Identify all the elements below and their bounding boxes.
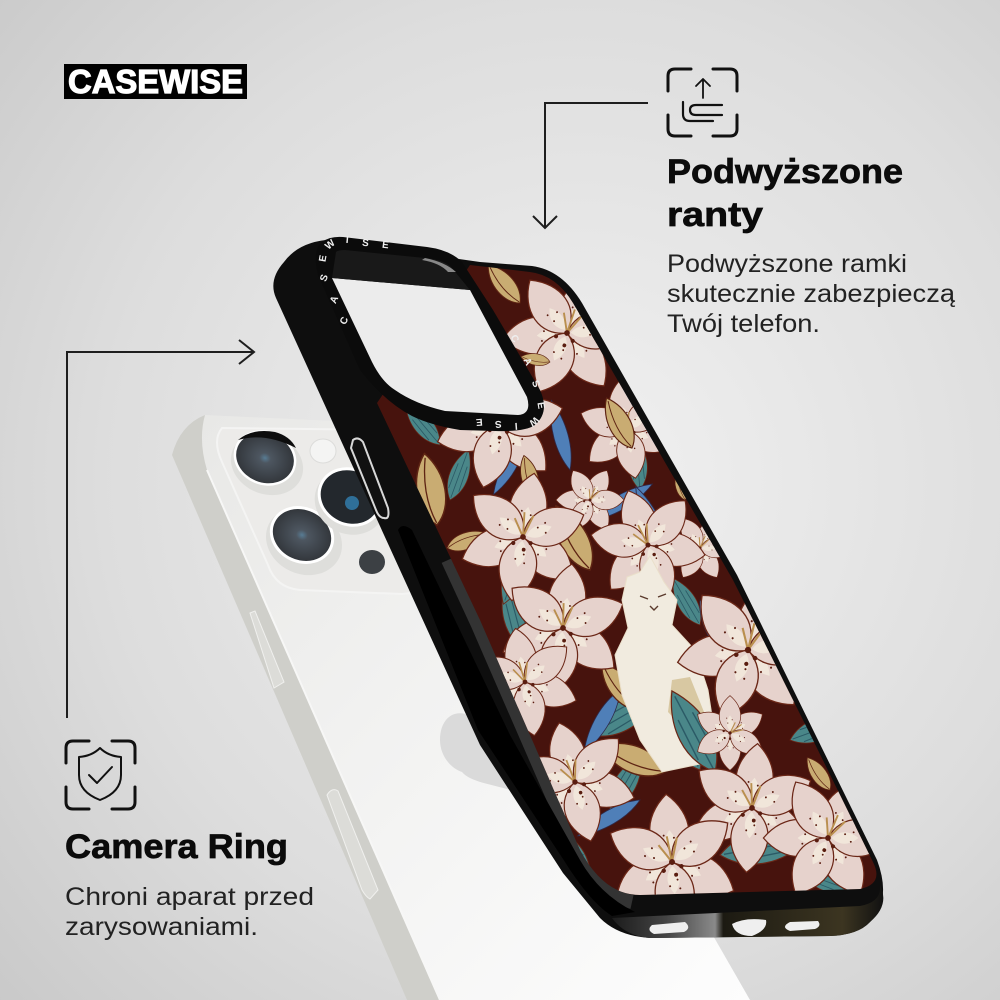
side buttons <box>250 611 378 899</box>
heading: camera ring: Camera Ring <box>65 828 288 866</box>
raised camera ring <box>316 235 547 431</box>
leaves <box>398 322 857 899</box>
text: camera ring: Chroni aparat przed <box>65 883 314 911</box>
text: raised edges: Podwyższone ramki <box>667 250 907 278</box>
phone back panel <box>197 415 750 1000</box>
text: raised edges: Twój telefon. <box>667 310 820 338</box>
bevel highlight <box>422 258 456 272</box>
white phone <box>172 415 750 1000</box>
logo: CASEWISE <box>68 63 243 100</box>
microphone <box>359 550 385 574</box>
black case <box>273 240 883 938</box>
ring text: E <box>475 416 483 427</box>
arrow: raised edges <box>533 103 648 228</box>
bottom port: right <box>785 921 819 931</box>
ring text: S <box>529 379 542 390</box>
lily flowers <box>462 472 706 842</box>
camera plateau <box>217 428 440 594</box>
ring text: S <box>494 418 502 429</box>
ring text: A <box>328 294 341 306</box>
bottom port: left <box>649 922 688 934</box>
heading: raised edges line 2: ranty <box>667 196 763 234</box>
side edge highlight <box>207 470 440 1000</box>
ring text: I <box>514 420 518 431</box>
text: raised edges: skutecznie zabezpieczą <box>667 280 955 308</box>
ring text: E <box>318 254 330 263</box>
ring text: C <box>508 333 521 345</box>
foreground lilies <box>610 594 870 895</box>
icon: shield <box>66 741 135 809</box>
phone side edge <box>172 415 440 1000</box>
front leaf over cat <box>670 690 718 769</box>
case artwork <box>377 265 876 895</box>
bottom wall <box>612 885 883 938</box>
white cat <box>615 556 716 772</box>
text: raised edges <box>667 250 955 338</box>
ring text: S <box>318 273 331 283</box>
flash <box>310 439 336 463</box>
lily flowers behind buds <box>436 280 720 578</box>
ring text <box>318 235 547 431</box>
heading: raised edges: Podwyższone <box>667 153 903 191</box>
inner wall band <box>448 560 632 902</box>
ring text: S <box>361 238 370 249</box>
ring text: C <box>338 315 351 327</box>
apple logo <box>440 713 510 790</box>
gold buds <box>411 259 836 794</box>
ring text: I <box>345 235 349 246</box>
text: camera ring: zarysowaniami. <box>65 913 258 941</box>
inner bevel <box>332 250 470 290</box>
black slot <box>398 526 635 916</box>
lens: bottom <box>255 495 353 587</box>
lens: top <box>221 421 313 506</box>
ring text: A <box>521 356 534 368</box>
ring frame <box>316 237 544 431</box>
side button on case <box>351 438 388 518</box>
ring text: E <box>381 240 390 251</box>
camera opening <box>332 278 528 415</box>
text: camera ring <box>65 883 314 941</box>
bottom port: centre <box>732 919 766 936</box>
ring text: E <box>534 401 547 410</box>
case shell <box>273 240 883 938</box>
artwork background <box>360 255 890 905</box>
lens: right <box>304 457 396 546</box>
arrow: camera ring <box>67 340 254 718</box>
ring text: W <box>323 237 338 252</box>
icon: raised edges <box>668 69 737 136</box>
ring text: W <box>526 414 541 429</box>
